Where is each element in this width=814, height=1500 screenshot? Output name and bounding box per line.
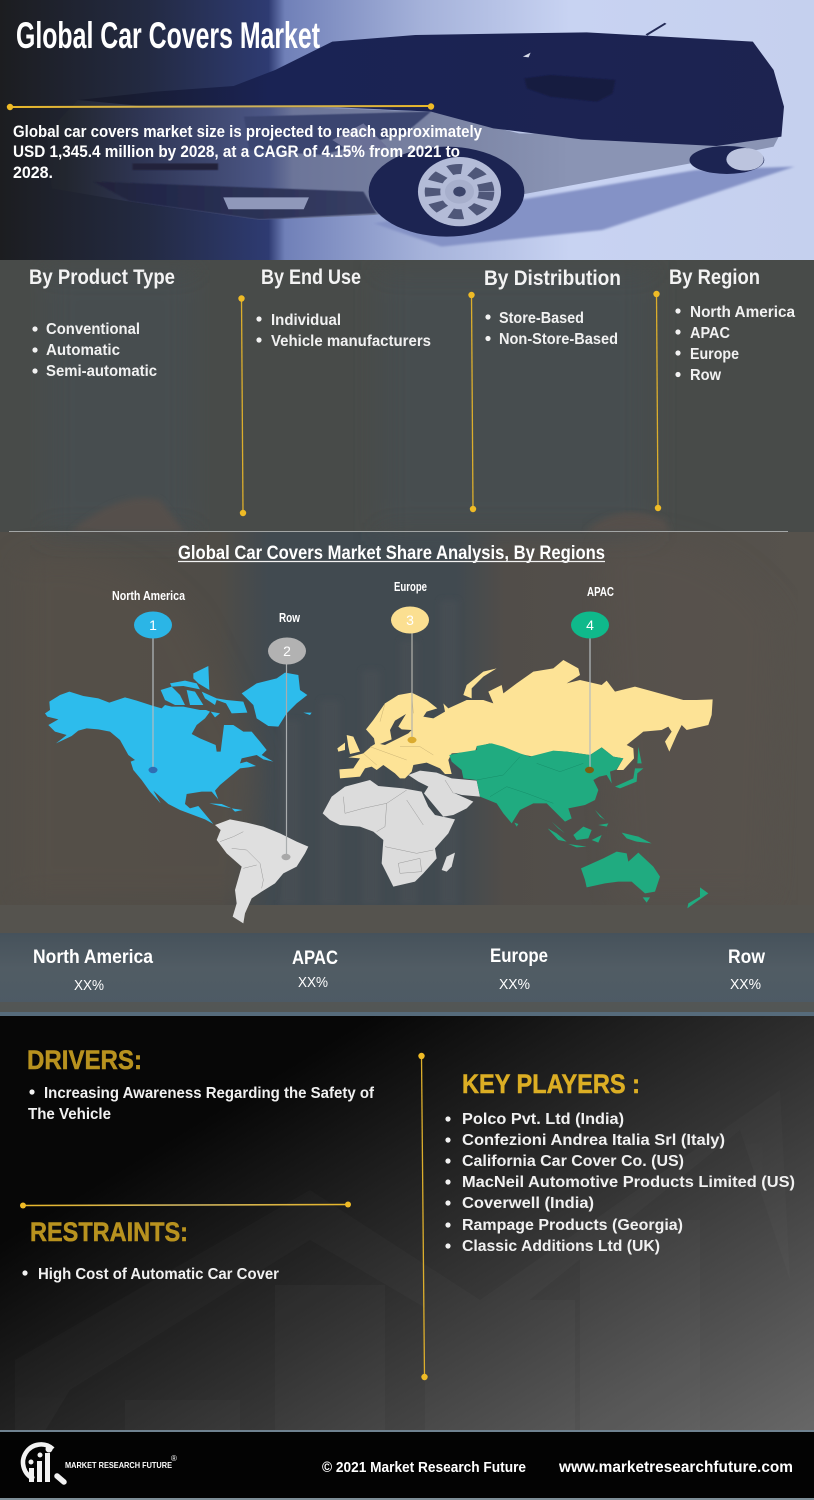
segment column: By Region: Europe	[690, 346, 739, 363]
panel: header with car photo	[0, 0, 814, 260]
map region: North America	[45, 666, 312, 824]
world map	[45, 579, 713, 923]
block: key players: California Car Cover Co. (US)	[462, 1153, 684, 1170]
segment column: By Distribution: Non-Store-Based	[499, 331, 618, 348]
block: key players: KEY PLAYERS :	[462, 1069, 640, 1099]
segment column: By Region	[669, 265, 795, 384]
segment column: By Region: Row	[690, 367, 722, 384]
share: Row	[729, 950, 765, 989]
share: Row: XX%	[730, 976, 761, 993]
marker: Row: Row	[279, 610, 301, 625]
block: key players: Confezioni Andrea Italia Srl (Italy)	[462, 1132, 725, 1149]
block: drivers: DRIVERS:	[27, 1045, 142, 1075]
segment column: By End Use: Individual	[271, 312, 341, 329]
block: key players: Classic Additions Ltd (UK)	[462, 1238, 660, 1255]
logo wordmark: MARKET RESEARCH FUTURE	[65, 1461, 173, 1470]
map region: Africa and Middle East	[323, 771, 480, 887]
share: Row: Row	[728, 947, 765, 968]
segment column: By End Use	[256, 265, 431, 350]
segment column: By Distribution: By Distribution	[484, 266, 621, 290]
map region: Asia Pacific	[449, 743, 708, 908]
heading: map title: Global Car Covers Market Share Analysis, By Regions	[178, 543, 605, 564]
panel: segmentation and map background	[0, 260, 814, 1015]
illustration: covered car	[47, 23, 794, 247]
marker: North America: North America	[112, 588, 186, 603]
logo wordmark	[65, 1454, 177, 1470]
block: restraints: High Cost of Automatic Car Cover	[38, 1266, 279, 1283]
segment column: By Region: By Region	[669, 265, 760, 289]
segment column: By Region: North America	[690, 304, 795, 321]
block: drivers	[27, 1045, 375, 1123]
title: Global Car Covers Market	[16, 15, 320, 56]
marker: Row	[268, 610, 306, 860]
block: key players: MacNeil Automotive Products Limited (US)	[462, 1174, 795, 1191]
share: APAC	[292, 950, 338, 987]
map region: South America	[215, 819, 308, 923]
map region: Europe and Russia	[337, 660, 713, 778]
intro text block: USD 1,345.4 million by 2028, at a CAGR of 4.15% from 2021 to	[13, 143, 460, 161]
segment column: By Product Type: By Product Type	[29, 265, 175, 289]
gold divider: header	[7, 103, 434, 110]
segment column: By Product Type	[29, 265, 175, 380]
share: Europe: XX%	[499, 976, 530, 993]
marker: APAC	[571, 584, 614, 773]
marker: APAC: 4	[586, 617, 594, 633]
intro text block	[14, 125, 482, 178]
block: key players: Rampage Products (Georgia)	[462, 1217, 683, 1234]
block: drivers: Increasing Awareness Regarding the Safety of	[44, 1085, 375, 1102]
panel: footer	[0, 1432, 814, 1498]
panel: drivers, restraints and key players	[0, 1016, 814, 1430]
intro text block: 2028.	[13, 164, 53, 182]
segment column: By Region: APAC	[690, 325, 730, 342]
share: APAC: XX%	[298, 974, 328, 991]
share: North America: XX%	[74, 977, 104, 994]
copyright: © 2021 Market Research Future	[322, 1459, 526, 1476]
block: key players	[445, 1069, 795, 1255]
block: restraints	[22, 1217, 279, 1283]
gold divider: restraints	[20, 1202, 351, 1208]
segment column: By End Use: By End Use	[261, 265, 361, 289]
segment column: By Distribution: Store-Based	[499, 310, 584, 327]
marker: Row: 2	[283, 643, 291, 659]
logo wordmark: ®	[171, 1454, 177, 1463]
share: North America: North America	[33, 947, 153, 968]
share: Europe	[491, 948, 548, 989]
block: drivers: The Vehicle	[28, 1106, 111, 1123]
marker: Europe: Europe	[394, 579, 427, 594]
marker: North America	[112, 588, 186, 773]
intro text block: Global car covers market size is projected to reach approximately	[13, 123, 483, 141]
website: www.marketresearchfuture.com	[558, 1459, 793, 1476]
segment column: By End Use: Vehicle manufacturers	[271, 333, 431, 350]
segment column: By Distribution	[485, 270, 620, 344]
marker: APAC: APAC	[587, 584, 614, 599]
segment column: By Product Type: Conventional	[46, 321, 140, 338]
block: restraints: RESTRAINTS:	[30, 1217, 188, 1247]
marker: Europe: 3	[406, 612, 414, 628]
share: North America	[34, 949, 154, 990]
marker: Europe	[391, 579, 429, 743]
block: key players: Coverwell (India)	[462, 1195, 594, 1212]
share: APAC: APAC	[292, 948, 338, 969]
share: Europe: Europe	[490, 946, 548, 967]
icon: magnifier logo	[23, 1444, 64, 1482]
block: key players: Polco Pvt. Ltd (India)	[462, 1111, 624, 1128]
marker: North America: 1	[149, 617, 157, 633]
segment column: By Product Type: Semi-automatic	[46, 363, 157, 380]
panel: regional share table	[0, 933, 814, 1012]
gold column dividers	[238, 291, 661, 516]
gold vertical divider	[418, 1053, 428, 1380]
segment column: By Product Type: Automatic	[46, 342, 120, 359]
